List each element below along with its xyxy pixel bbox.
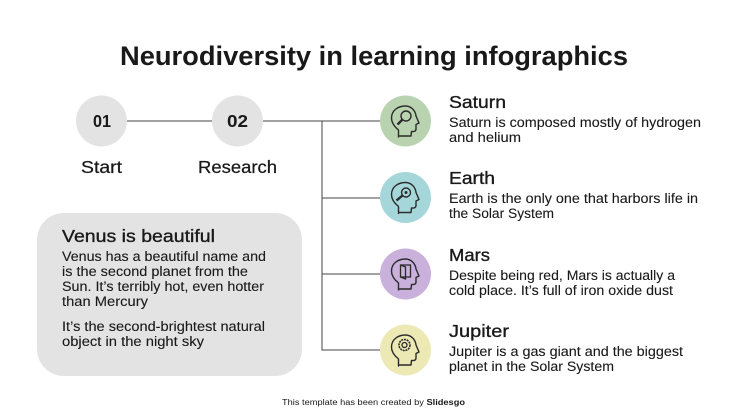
icon: Jupiter head with gear: [380, 324, 431, 376]
title: Neurodiversity in learning infographics: [120, 41, 628, 71]
step 02: Research: [198, 157, 277, 177]
step 02: [198, 96, 277, 177]
Venus text: is the second planet from the: [62, 264, 248, 279]
Venus heading: Venus is beautiful: [62, 226, 215, 246]
Venus text: Venus has a beautiful name and: [62, 249, 266, 264]
icon: Saturn head with magnifier: [380, 96, 431, 146]
step 02: 02: [227, 111, 248, 131]
step 01: [76, 96, 127, 177]
Earth text: Earth is the only one that harbors life in: [449, 191, 698, 206]
Jupiter text: planet in the Solar System: [449, 359, 614, 374]
Venus text: than Mercury: [62, 294, 148, 309]
step 01: Start: [81, 157, 122, 177]
Mars text: [449, 245, 676, 298]
Venus text: object in the night sky: [62, 334, 204, 349]
Venus text: It’s the second-brightest natural: [62, 319, 265, 334]
Jupiter text: Jupiter is a gas giant and the biggest: [449, 344, 683, 359]
Saturn text: Saturn is composed mostly of hydrogen: [449, 115, 701, 130]
Mars text: Despite being red, Mars is actually a: [449, 268, 676, 283]
panel: Venus: [37, 213, 302, 376]
icon: Earth head with key: [380, 172, 431, 223]
Venus text: Sun. It’s terribly hot, even hotter: [62, 279, 265, 294]
Mars text: Mars: [449, 245, 490, 265]
footer credit: This template has been created by Slidesgo: [282, 398, 465, 407]
Mars text: cold place. It’s full of iron oxide dust: [449, 283, 673, 298]
Saturn text: and helium: [449, 130, 521, 145]
Jupiter text: [449, 321, 683, 374]
Venus text: [62, 249, 266, 349]
Earth text: Earth: [449, 168, 495, 188]
Saturn text: Saturn: [449, 92, 506, 112]
icon: Mars head with door: [380, 248, 431, 300]
step 01: 01: [93, 111, 111, 131]
Earth text: the Solar System: [449, 206, 554, 221]
Earth text: [449, 168, 698, 221]
Saturn text: [449, 92, 701, 145]
connector lines: [127, 121, 380, 350]
Jupiter text: Jupiter: [449, 321, 509, 341]
